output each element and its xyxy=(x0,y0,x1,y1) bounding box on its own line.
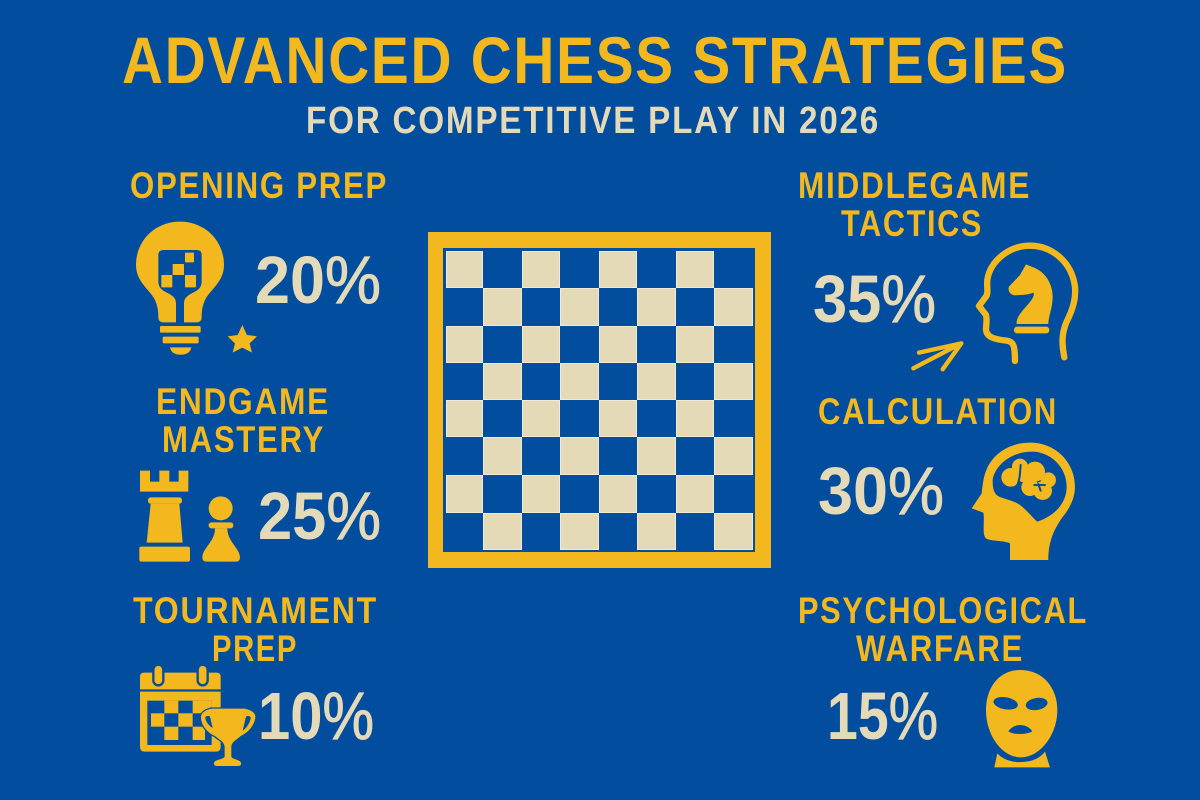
heading: psychological warfare xyxy=(798,590,1088,669)
icon: head with brain xyxy=(972,443,1075,560)
heading: endgame mastery xyxy=(156,381,330,460)
value: 20%: 20% xyxy=(255,243,381,318)
icon: head with knight xyxy=(979,246,1075,361)
value: 35%: 35% xyxy=(813,262,936,337)
value: 25%: 25% xyxy=(258,479,381,554)
value: 30%: 30% xyxy=(818,454,944,529)
panel: opening prep xyxy=(130,165,388,355)
heading: tournament prep: TOURNAMENT xyxy=(133,590,378,631)
value: 10%: 10% xyxy=(258,679,374,754)
heading: psychological warfare: WARFARE xyxy=(856,628,1024,669)
panel: middlegame tactics xyxy=(798,165,1075,369)
icon: balaclava mask xyxy=(986,670,1057,767)
panel: calculation xyxy=(818,391,1075,560)
heading: middlegame tactics: MIDDLEGAME xyxy=(798,165,1031,206)
heading: tournament prep: PREP xyxy=(212,628,298,669)
title: ADVANCED CHESS STRATEGIES xyxy=(122,23,1068,97)
icon: rook and pawn xyxy=(139,471,240,562)
panel: chessboard xyxy=(428,232,771,568)
heading: tournament prep xyxy=(133,590,378,669)
icon: calendar with trophy xyxy=(140,665,255,766)
heading: middlegame tactics xyxy=(798,165,1031,244)
arrow xyxy=(913,343,961,369)
heading: calculation: CALCULATION xyxy=(818,391,1058,432)
panel: endgame mastery xyxy=(139,381,381,562)
subtitle: FOR COMPETITIVE PLAY IN 2026 xyxy=(306,100,880,142)
value: 15%: 15% xyxy=(827,679,938,754)
heading: endgame mastery: ENDGAME xyxy=(156,381,330,422)
heading: opening prep: OPENING PREP xyxy=(130,165,388,206)
heading: psychological warfare: PSYCHOLOGICAL xyxy=(798,590,1088,631)
panel: psychological warfare xyxy=(798,590,1088,767)
icon: light bulb with chess squares xyxy=(136,222,257,355)
panel: tournament prep xyxy=(133,590,378,766)
heading: endgame mastery: MASTERY xyxy=(162,419,325,460)
heading: middlegame tactics: TACTICS xyxy=(841,203,983,244)
